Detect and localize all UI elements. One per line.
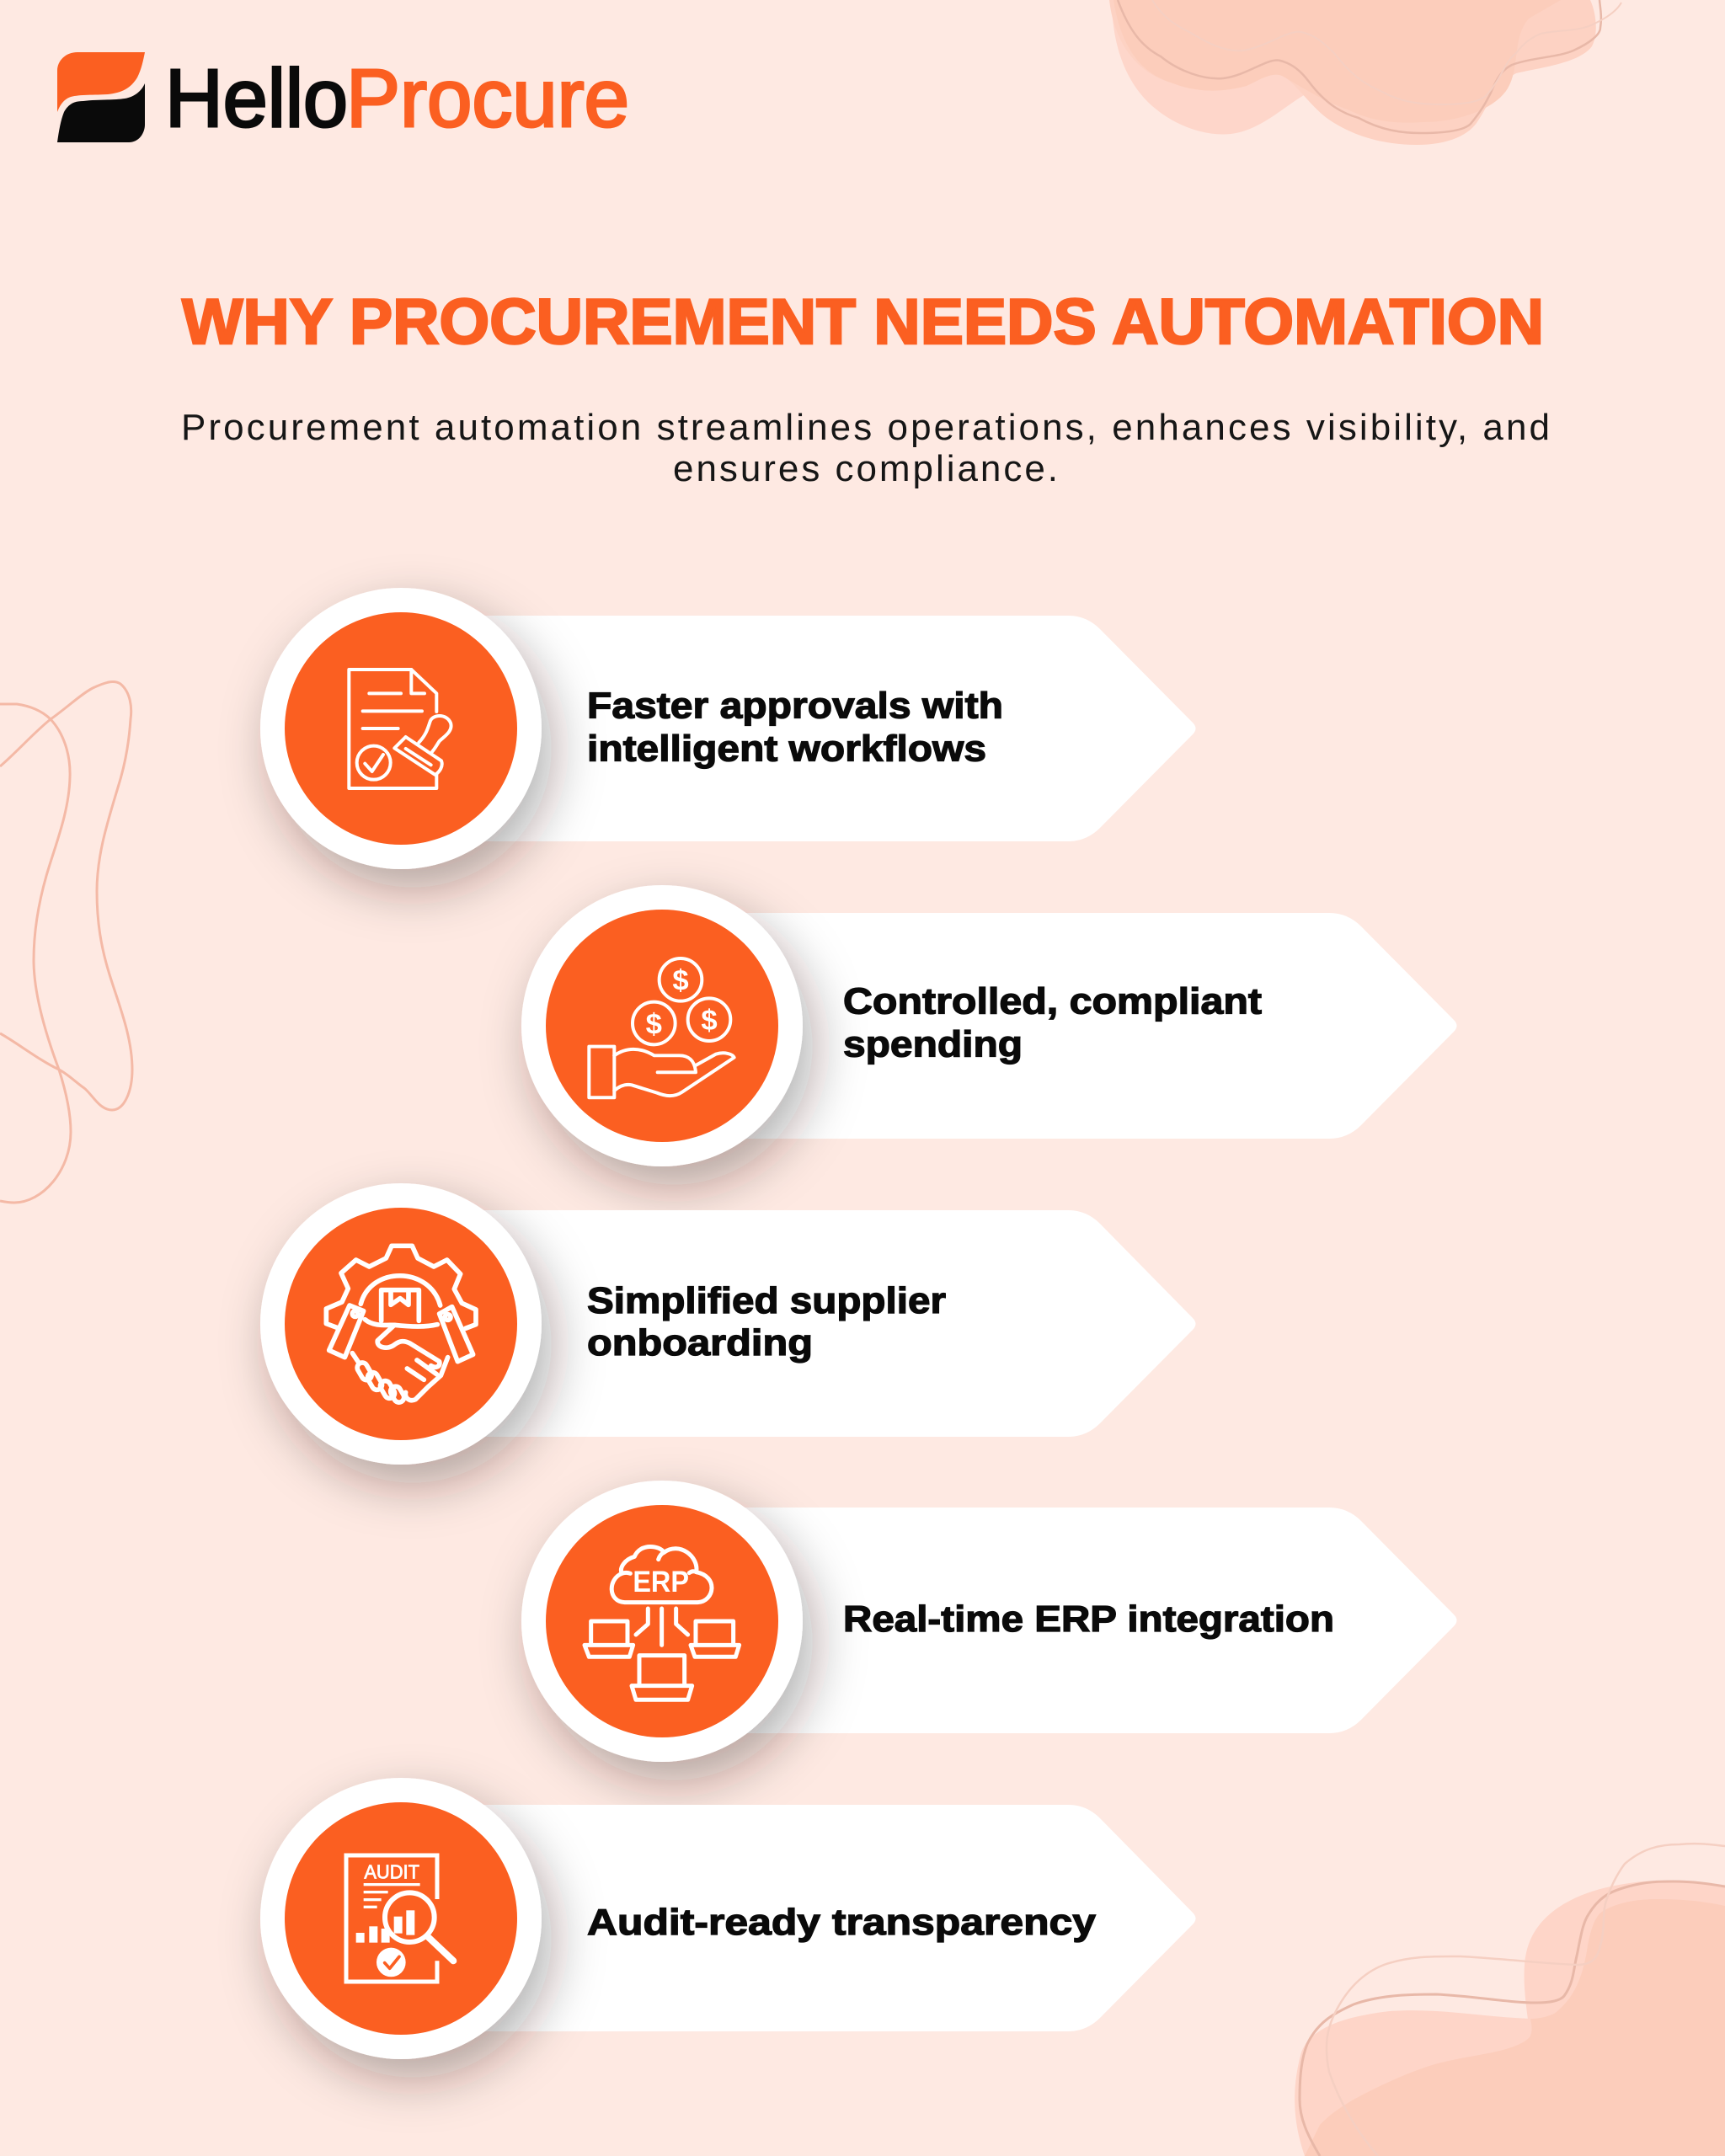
- label: controlled spending: spending: [843, 1024, 1023, 1065]
- subtitle: Procurement automation streamlines operations, enhances visibility, and: [181, 407, 1550, 448]
- panel: erp integration: [521, 1481, 1457, 1762]
- label: supplier onboarding: Simplified supplier: [587, 1280, 946, 1321]
- panel: supplier onboarding: [260, 1183, 1196, 1465]
- title: WHY PROCUREMENT NEEDS AUTOMATION: [182, 286, 1544, 358]
- logo wordmark: [165, 52, 629, 144]
- label: faster approvals: [587, 686, 1003, 770]
- decoration: bottom-right blobs: [1295, 1844, 1725, 2156]
- icon: gear and handshake: [326, 1246, 476, 1404]
- decoration: left squiggle lines: [0, 682, 132, 1203]
- label: supplier onboarding: onboarding: [587, 1322, 813, 1364]
- icon: ERP cloud and laptops: ERP: [633, 1566, 689, 1598]
- label: faster approvals: Faster approvals with: [587, 686, 1003, 726]
- panel: controlled spending: [521, 885, 1457, 1166]
- logo wordmark: Hello: [165, 52, 348, 144]
- icon: ERP cloud and laptops: [585, 1546, 740, 1700]
- icon: hand with coins: $: [701, 1005, 718, 1037]
- decoration: top-right blobs: [1109, 0, 1621, 145]
- label: faster approvals: intelligent workflows: [587, 728, 986, 770]
- subtitle: ensures compliance.: [673, 448, 1058, 489]
- label: controlled spending: [843, 980, 1262, 1065]
- label: supplier onboarding: [587, 1280, 946, 1364]
- icon: audit report: AUDIT: [364, 1861, 419, 1883]
- icon: logo mark: [57, 52, 145, 142]
- subtitle: [181, 407, 1550, 489]
- icon: hand with coins: [589, 958, 734, 1097]
- icon: hand with coins: $: [646, 1008, 662, 1040]
- logo: [57, 52, 629, 144]
- panel: faster approvals: [260, 588, 1196, 869]
- label: controlled spending: Controlled, compliant: [843, 980, 1262, 1022]
- label: erp integration: Real-time ERP integration: [843, 1598, 1334, 1640]
- icon: audit report: [346, 1855, 453, 1982]
- icon: document with stamp: [349, 670, 451, 788]
- label: audit transparency: Audit-ready transparency: [587, 1902, 1097, 1943]
- panel: audit transparency: [260, 1778, 1196, 2059]
- icon: hand with coins: $: [672, 965, 689, 997]
- logo wordmark: Procure: [346, 52, 629, 144]
